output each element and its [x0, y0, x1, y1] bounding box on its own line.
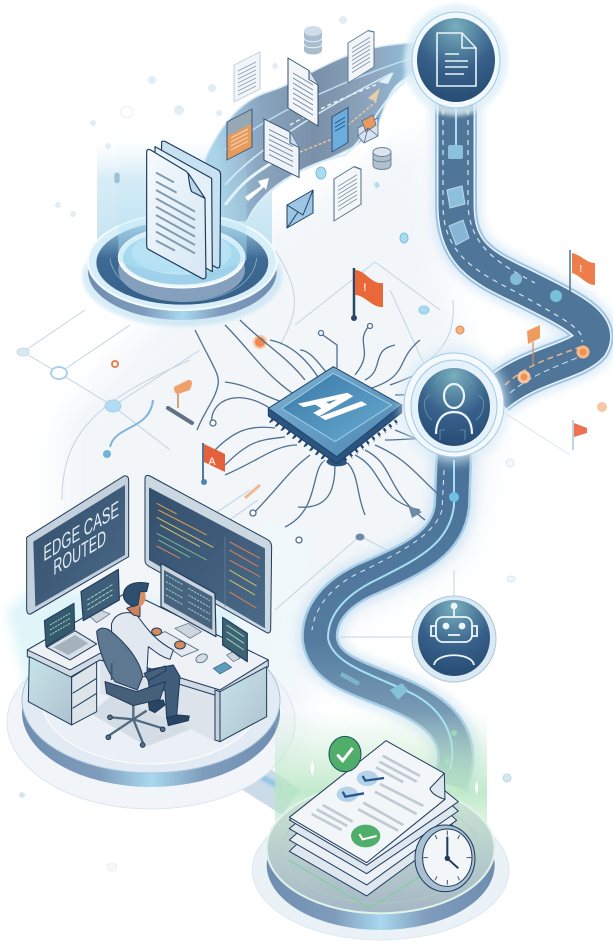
- code lines: [157, 503, 260, 608]
- road glow: [578, 347, 588, 357]
- top data road: [205, 43, 414, 222]
- pale node: [503, 774, 511, 782]
- green badge: [329, 736, 361, 772]
- road node: [449, 492, 459, 502]
- chair shadow: [90, 667, 213, 747]
- desk top: [27, 592, 268, 697]
- road marker: [550, 290, 562, 302]
- warning sign: [168, 380, 192, 423]
- letter flag: A: [208, 456, 216, 468]
- chip pins: [271, 420, 399, 463]
- orange node: [597, 402, 607, 412]
- wire arrow: [408, 505, 422, 518]
- armrest: [144, 666, 166, 681]
- small capsule: [114, 173, 120, 183]
- orange node: [456, 326, 464, 334]
- AI chip: [268, 367, 402, 466]
- red flag: !: [363, 282, 367, 294]
- pale node: [507, 576, 515, 582]
- route flag: !: [579, 264, 582, 275]
- arrow: [368, 88, 380, 102]
- network node: [400, 233, 408, 243]
- road marker: [447, 186, 465, 208]
- road sign: [527, 325, 540, 365]
- torso and arm: [111, 613, 173, 677]
- wire terminal: [210, 420, 216, 426]
- document: [348, 27, 374, 83]
- person at desk: [97, 583, 189, 747]
- road marker: [448, 145, 463, 159]
- platform surface: [267, 783, 495, 913]
- paper stack: [289, 741, 458, 896]
- orange report: [227, 109, 252, 160]
- wire terminal: [250, 510, 256, 516]
- wire terminal: [318, 330, 324, 336]
- network node: [17, 348, 29, 356]
- light column behind source: [97, 140, 272, 270]
- chair base: [108, 703, 163, 744]
- blue card: [332, 107, 348, 152]
- human workstation platform: [7, 475, 295, 809]
- left cabinet: [28, 657, 97, 725]
- road: from document node to human node: [443, 100, 593, 395]
- road: from human node to robot and review: [312, 450, 459, 785]
- flow node: [316, 167, 326, 179]
- right monitor: [145, 475, 272, 633]
- desk underside panel: [100, 657, 215, 742]
- network node: [105, 400, 121, 412]
- head: [128, 586, 146, 607]
- chair back: [97, 628, 143, 690]
- floating particles: [55, 16, 380, 217]
- connector beam between platforms: [230, 762, 300, 815]
- circuit detail: [424, 372, 484, 440]
- road marker: [390, 683, 408, 700]
- document: [334, 162, 361, 221]
- source platform: [82, 133, 282, 327]
- envelope: [287, 190, 313, 228]
- hair: [123, 583, 149, 607]
- document icon: [437, 33, 476, 86]
- arrow: [378, 72, 394, 84]
- clock: [415, 825, 475, 892]
- database icon: [304, 26, 322, 54]
- hand: [152, 628, 162, 635]
- mouse: [195, 652, 209, 664]
- green glow behind review: [275, 710, 487, 860]
- shoe: [167, 715, 189, 726]
- monitor text: ROUTED: [53, 524, 106, 580]
- center monitor: [161, 563, 216, 638]
- document node: [404, 4, 508, 116]
- orange node: [112, 361, 118, 367]
- hand: [175, 641, 185, 649]
- robot node: [412, 596, 496, 682]
- outer rim: [88, 223, 277, 320]
- letter flag: [201, 443, 225, 485]
- road marker: [340, 672, 360, 686]
- route flag: [570, 250, 595, 297]
- wire terminal: [368, 324, 372, 328]
- red flag: [351, 268, 383, 321]
- inner rim: [118, 238, 245, 302]
- network node: [419, 306, 429, 314]
- neck: [127, 603, 140, 617]
- road glow: [519, 372, 529, 382]
- chip body: [268, 405, 402, 464]
- desk notebook: [213, 662, 232, 674]
- document: [264, 119, 299, 178]
- monitor text: EDGE CASE: [43, 495, 119, 566]
- network node: [356, 534, 364, 540]
- arrow: [245, 178, 269, 201]
- road node: [444, 758, 450, 764]
- left monitor: [27, 476, 129, 614]
- pale node: [19, 792, 25, 798]
- road node: [451, 730, 457, 736]
- final review platform: [252, 715, 509, 940]
- sparkles: [310, 715, 478, 795]
- background wash: [6, 130, 500, 780]
- paper lines: [312, 756, 423, 831]
- blue check: [337, 787, 364, 802]
- chip pedestal: [327, 457, 348, 466]
- side monitor: [223, 617, 247, 662]
- leg: [147, 665, 180, 718]
- flying documents: [227, 26, 391, 228]
- wire terminal: [296, 537, 302, 543]
- pale node: [506, 459, 514, 467]
- blue node: [103, 450, 111, 458]
- orange node: [254, 336, 266, 348]
- laptop: [44, 603, 97, 660]
- road marker: [510, 273, 522, 285]
- small monitor: [81, 569, 119, 623]
- document: [234, 52, 260, 102]
- rising light: [118, 133, 247, 272]
- network node: [391, 551, 401, 559]
- small node: [374, 182, 380, 188]
- flags: [168, 250, 595, 485]
- chip label: AI: [287, 385, 378, 425]
- light spark: [404, 74, 414, 84]
- pale node: [107, 863, 117, 871]
- blue check: [357, 771, 384, 786]
- database icon: [373, 148, 391, 170]
- network node: [51, 367, 67, 379]
- right cabinet: [215, 667, 267, 742]
- package: [358, 115, 378, 143]
- document: [288, 58, 318, 126]
- distant flag: [573, 420, 587, 450]
- network lines and nodes: [17, 233, 607, 871]
- document lines: [156, 173, 195, 253]
- platform rim: [267, 800, 495, 930]
- workstation: [27, 475, 272, 747]
- AI chip wires: [103, 320, 465, 543]
- robot icon: [431, 604, 477, 665]
- chair seat: [105, 682, 166, 706]
- document stack: [147, 141, 221, 279]
- person icon: [436, 384, 472, 434]
- dark band: [96, 221, 268, 305]
- far shoe: [148, 700, 165, 713]
- keyboard: [153, 632, 198, 657]
- road marker: [449, 220, 469, 245]
- human review node: [400, 347, 508, 463]
- green page check: [351, 825, 380, 847]
